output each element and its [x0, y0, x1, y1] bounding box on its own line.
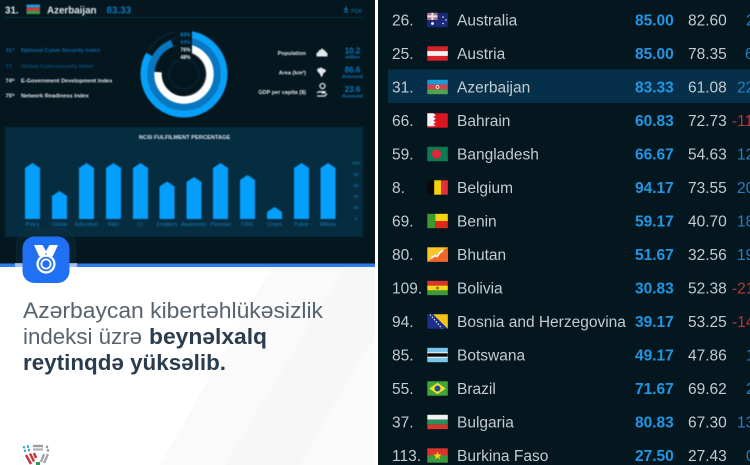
row: Bosnia and Herzegovina: 53.25	[688, 314, 727, 331]
row: Bangladesh: 54.63	[688, 146, 727, 163]
row: Botswana: 49.17	[635, 347, 674, 364]
row: Bangladesh	[392, 146, 750, 163]
row: Botswana: Botswana	[457, 347, 525, 364]
panel: NCSI fulfilment bar chart	[5, 127, 363, 237]
row: Benin: 40.70	[688, 213, 727, 230]
row: Bahrain: 60.83	[635, 113, 674, 130]
country statistics: thousand	[342, 74, 363, 79]
icon: GDP per capita	[317, 84, 327, 96]
row: Bosnia and Herzegovina	[392, 314, 750, 331]
row: Bolivia	[392, 280, 750, 297]
row: Austria: 78.35	[688, 46, 727, 63]
row: Brazil: 55.	[392, 381, 414, 398]
row: Azerbaijan highlighted: Azerbaijan	[457, 79, 530, 96]
icon: blue medal badge	[15, 229, 77, 283]
vertical divider	[375, 0, 378, 465]
index ranking list: Global Cybersecurity Index	[21, 64, 94, 70]
row: Bosnia and Herzegovina: Bosnia and Herzegovina	[457, 314, 626, 331]
row: Benin: Benin	[457, 213, 497, 230]
row: Australia: 82.60	[688, 12, 727, 29]
row: Australia: 85.00	[635, 12, 674, 29]
row: Bosnia and Herzegovina: 39.17	[635, 314, 674, 331]
row: Bhutan: Bhutan	[457, 247, 506, 264]
row: Bhutan: 80.	[392, 247, 414, 264]
flag: Benin	[427, 214, 448, 228]
row: Brazil	[392, 381, 750, 398]
row: Burkina Faso: Burkina Faso	[457, 448, 548, 465]
row: Botswana	[392, 347, 750, 364]
row: Australia	[392, 12, 750, 29]
bar category labels: Military	[320, 222, 337, 228]
flag: Bangladesh	[427, 147, 448, 161]
country statistics: 86.6	[345, 66, 361, 75]
donut percentage labels: 76%	[180, 48, 191, 54]
headline text: Azərbaycan kibertəhlükəsizlik	[23, 298, 324, 323]
row: Brazil: 71.67	[635, 381, 674, 398]
flag: Bhutan	[427, 247, 448, 262]
y axis labels: 20	[353, 205, 359, 211]
index ranking list: E-Government Development Index	[21, 79, 113, 85]
row: Bhutan: 51.67	[635, 247, 674, 264]
flag: Bosnia and Herzegovina	[427, 314, 448, 329]
row: Botswana: 47.86	[688, 347, 727, 364]
donut percentage labels: 94%	[180, 40, 191, 46]
index ranking list: th	[12, 93, 15, 97]
row: Australia: Australia	[457, 12, 518, 29]
bar category labels: CI	[137, 222, 143, 228]
index ranking list: National Cyber Security Index	[21, 48, 101, 54]
row: Bahrain: 66.	[392, 113, 414, 130]
row: Burkina Faso: 27.50	[635, 448, 674, 465]
donut percentage labels	[180, 32, 191, 61]
row: Belgium	[392, 180, 750, 197]
y axis labels: 40	[353, 194, 359, 200]
bar category labels: Awareness	[181, 222, 207, 228]
headline text: indeksi üzrə	[23, 324, 142, 349]
row: Bolivia: 109.	[392, 280, 422, 297]
donut chart: four index rings	[141, 29, 227, 117]
headline text: beynəlxalq	[149, 324, 267, 349]
country statistics: Population	[278, 51, 307, 57]
row: Azerbaijan highlighted: 83.33	[635, 79, 674, 96]
headline text: reytinqdə yüksəlib.	[23, 350, 226, 375]
flag: Burkina Faso	[427, 448, 448, 463]
y axis labels: 100	[352, 160, 360, 166]
header row: Azerbaijan score: 83.33	[106, 5, 132, 16]
country statistics: million	[345, 55, 360, 60]
blue divider band	[0, 264, 375, 267]
row: Austria: 85.00	[635, 46, 674, 63]
country statistics	[258, 46, 363, 98]
row: Azerbaijan highlighted: 31.	[392, 79, 414, 96]
logo mark	[23, 446, 49, 464]
row: Azerbaijan highlighted	[392, 79, 750, 96]
index ranking list: th	[12, 78, 15, 82]
row: Brazil: Brazil	[457, 381, 496, 398]
country statistics: GDP per capita ($)	[258, 90, 306, 96]
y axis labels	[352, 160, 360, 222]
country statistics: Area (km²)	[279, 70, 306, 77]
row: Bulgaria	[392, 414, 750, 431]
bar category labels: Education	[75, 222, 98, 228]
bar category labels: Police	[294, 222, 309, 228]
row: Bangladesh: Bangladesh	[457, 146, 539, 163]
row: Benin: 59.17	[635, 213, 674, 230]
header row: Azerbaijan score: 31.	[5, 5, 19, 16]
country statistics: thousand	[342, 94, 363, 98]
index ranking list	[6, 48, 113, 100]
row: Belgium: 73.55	[688, 180, 727, 197]
index ranking list: 75	[6, 94, 12, 100]
bar category labels: Crises	[267, 222, 282, 228]
flag: Austria	[427, 46, 448, 61]
row: Bulgaria: 80.83	[635, 414, 674, 431]
row: Bangladesh: 59.	[392, 146, 414, 163]
row: Bolivia: 52.38	[688, 280, 727, 297]
flag: Bulgaria	[427, 415, 448, 429]
row: Belgium: Belgium	[457, 180, 513, 197]
headline text	[23, 298, 324, 375]
header row: Azerbaijan score	[5, 4, 363, 18]
flag: Bahrain	[427, 113, 448, 128]
flag: Australia	[427, 13, 448, 27]
row: Bolivia: 30.83	[635, 280, 674, 297]
background: white panel diagonal shapes	[160, 267, 375, 465]
row: Bulgaria: 67.30	[688, 414, 727, 431]
panel: NCSI fulfilment bar chart: NCSI FULFILMENT PERCENTAGE	[139, 135, 230, 141]
flag: Belgium	[427, 180, 448, 195]
donut percentage labels: 48%	[180, 55, 191, 61]
flag: Azerbaijan	[427, 80, 448, 94]
index ranking list: 74	[6, 79, 12, 85]
row: Bulgaria: Bulgaria	[457, 414, 514, 431]
row: Austria	[392, 46, 750, 63]
row: Bahrain	[392, 113, 750, 130]
flag: Bolivia	[427, 281, 448, 295]
bar category labels: Personal	[210, 222, 231, 228]
row: Bosnia and Herzegovina: 94.	[392, 314, 414, 331]
flag: Brazil	[427, 381, 448, 396]
row: Burkina Faso: 113.	[392, 448, 421, 465]
flag: Botswana	[427, 348, 448, 362]
row: Belgium: 8.	[392, 180, 405, 197]
icon: population	[316, 48, 328, 56]
donut percentage labels: 83%	[180, 32, 191, 38]
country statistics: 23.6	[345, 85, 361, 94]
bar category labels: R&D	[108, 222, 119, 228]
row: Benin	[392, 213, 750, 230]
row: Benin: 69.	[392, 213, 414, 230]
y axis labels: 0	[355, 216, 358, 222]
bar category labels: CIRC	[241, 222, 254, 228]
row: Bolivia: Bolivia	[457, 280, 503, 297]
panel: ranking table	[378, 0, 750, 465]
y axis labels: 60	[353, 183, 359, 189]
header row: Azerbaijan score: PDF	[351, 9, 363, 15]
bar category labels: Global	[52, 222, 67, 228]
row: Belgium: 94.17	[635, 180, 674, 197]
y axis labels: 80	[353, 172, 359, 178]
index ranking list: st	[12, 48, 16, 52]
row: Austria: Austria	[457, 46, 506, 63]
row: Bhutan: 32.56	[688, 247, 727, 264]
index ranking list: T2	[6, 64, 12, 70]
index ranking list: Network Readiness Index	[21, 94, 90, 100]
row: Bhutan	[392, 247, 750, 264]
row: Azerbaijan highlighted: 61.08	[688, 79, 727, 96]
bar category labels: Enablers	[157, 222, 178, 228]
bar category labels: Policy	[26, 222, 40, 228]
row: Burkina Faso	[392, 448, 750, 465]
highlighted row background	[388, 70, 750, 103]
row: Botswana: 85.	[392, 347, 414, 364]
row: Brazil: 69.62	[688, 381, 727, 398]
country statistics: 10.2	[345, 46, 361, 56]
row: Austria: 25.	[392, 46, 414, 63]
index ranking list: 31	[6, 48, 12, 54]
bars	[25, 163, 336, 219]
row: Bangladesh: 66.67	[635, 146, 674, 163]
row: Australia: 26.	[392, 12, 414, 29]
row: Burkina Faso: 27.43	[688, 448, 727, 465]
bar category labels	[26, 222, 337, 228]
row: Bahrain: Bahrain	[457, 113, 510, 130]
row: Bulgaria: 37.	[392, 414, 414, 431]
icon: area map	[317, 68, 326, 77]
header row: Azerbaijan score: Azerbaijan	[47, 5, 97, 16]
row: Bahrain: 72.73	[688, 113, 727, 130]
panel: left dashboard screenshot	[0, 0, 375, 264]
